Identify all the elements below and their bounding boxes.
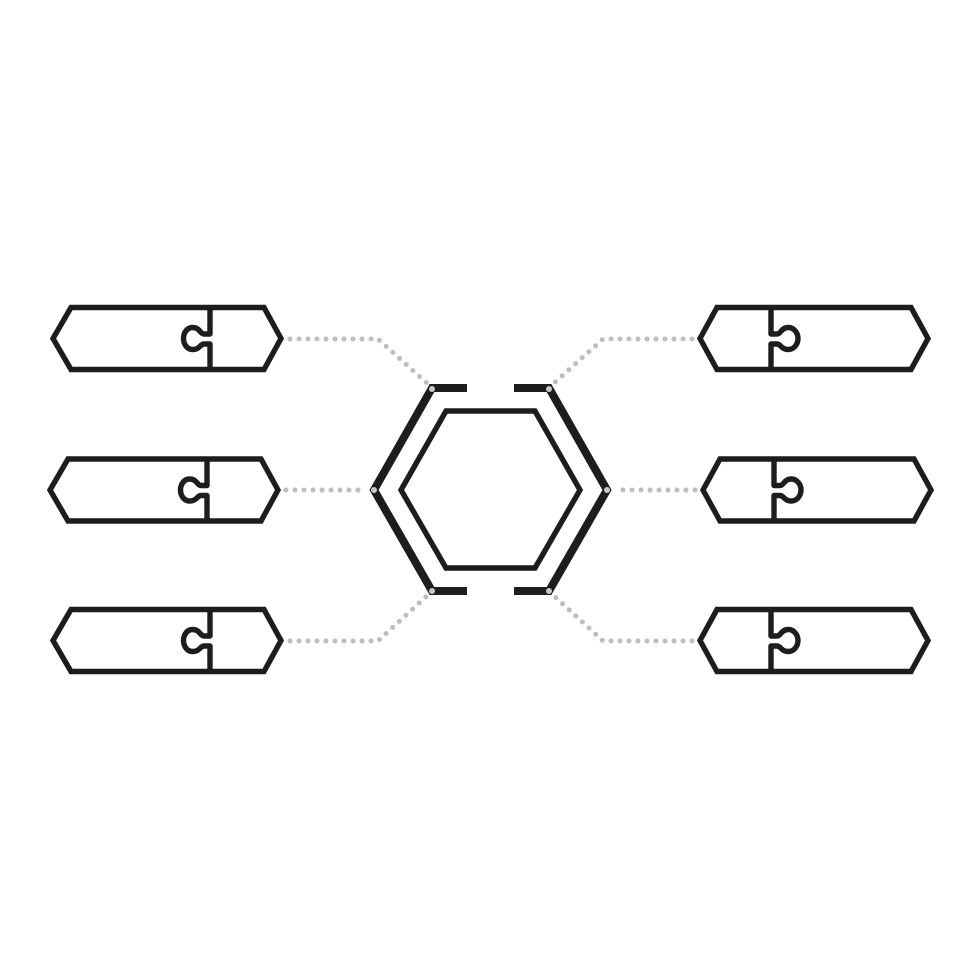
puzzle label box: top right: [700, 308, 928, 370]
puzzle label box: middle left: [50, 459, 278, 521]
puzzle label box: bottom left: [53, 610, 281, 672]
central hexagon: [371, 386, 610, 594]
connector: middle left: [286, 488, 367, 492]
connector: top left: [290, 339, 429, 385]
connector: bottom left: [290, 594, 429, 641]
inner hexagon: [401, 411, 580, 568]
bracket joints: [371, 386, 610, 594]
puzzle label box: top left: [53, 308, 281, 370]
outer bracket: left: [374, 388, 467, 591]
puzzle label box: bottom right: [700, 610, 928, 672]
outer bracket: right: [514, 388, 607, 591]
connector: top right: [552, 339, 692, 385]
connector: middle right: [614, 488, 695, 492]
puzzle label box: middle right: [703, 459, 931, 521]
connector: bottom right: [552, 594, 692, 641]
